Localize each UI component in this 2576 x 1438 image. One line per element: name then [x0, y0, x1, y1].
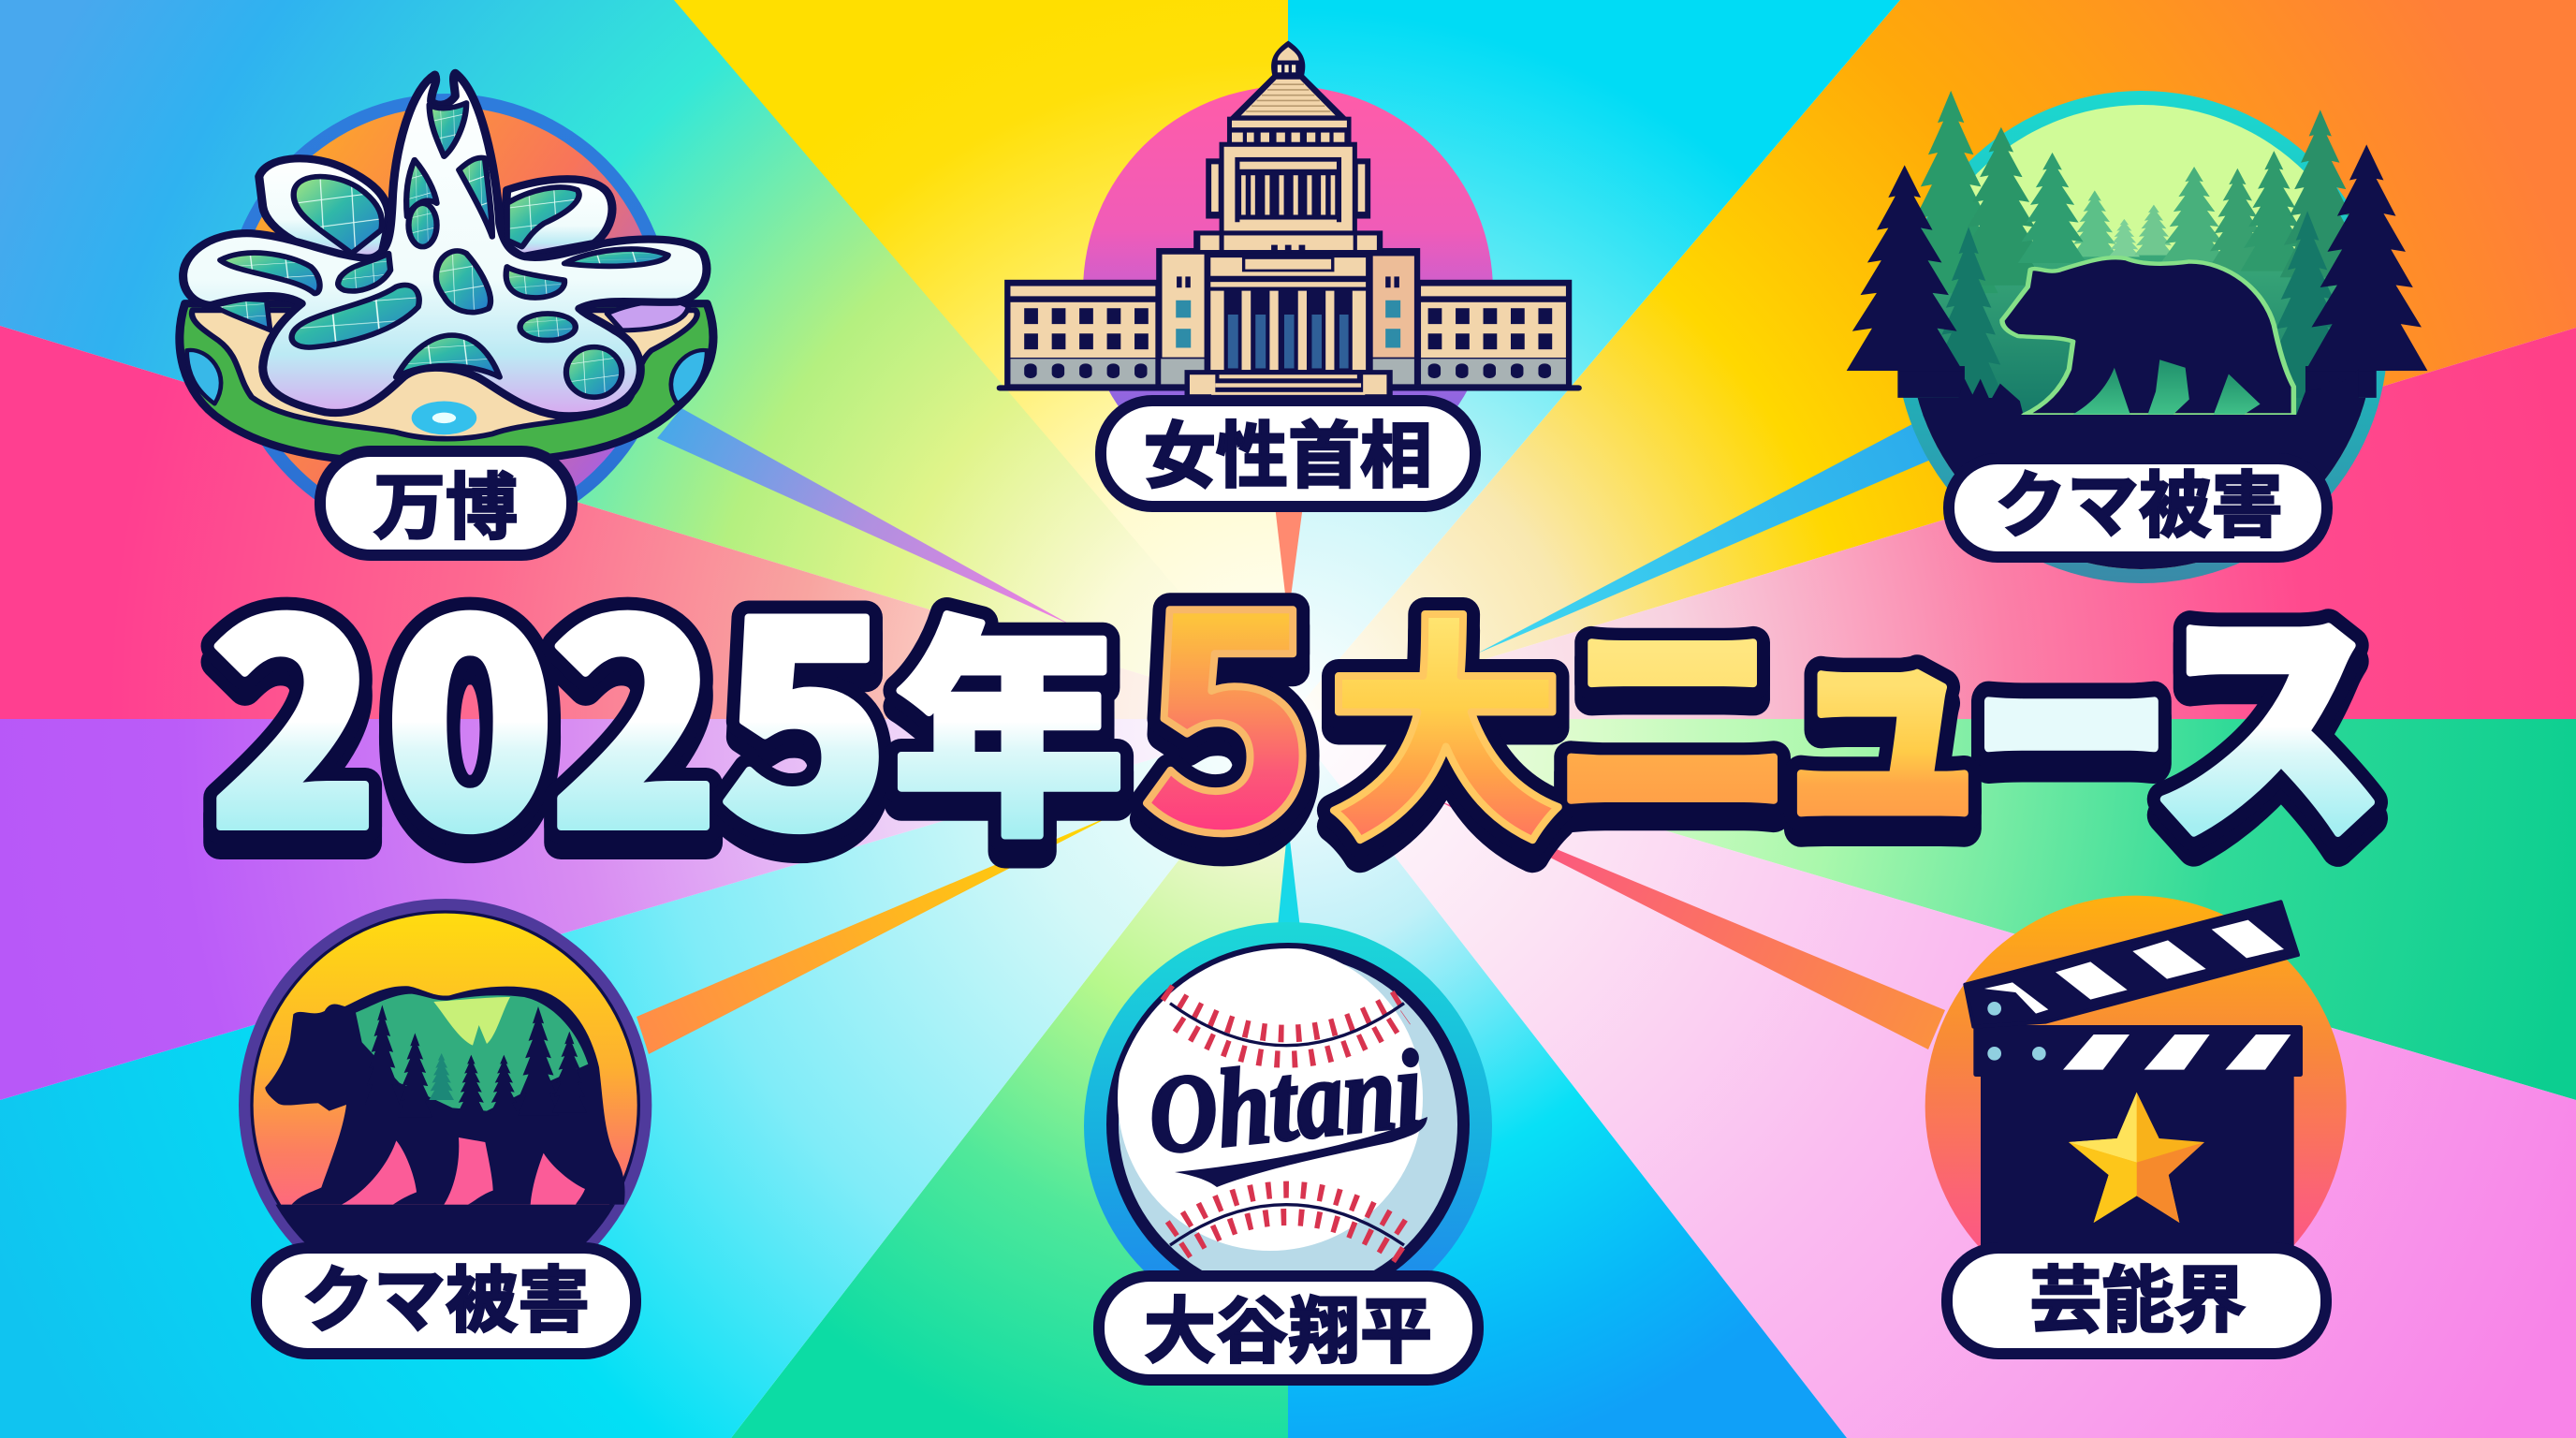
title: 2025年5大ニュース: ニ: [1551, 534, 1798, 874]
connector rays: [637, 408, 1945, 1054]
icon: bear silhouette badge: [239, 899, 651, 1354]
title: 2025年5大ニュース: ス: [2149, 524, 2387, 893]
title: 2025年5大ニュース: 大: [1325, 542, 1565, 888]
title: 2025年5大ニュース: 年: [893, 545, 1125, 881]
icon: baseball: [1084, 922, 1492, 1380]
label: クマ被害 (bottom): [256, 1248, 636, 1354]
title: 2025年5大ニュース: 2: [549, 502, 720, 908]
label: 万博: 万博: [373, 468, 518, 549]
label: 大谷翔平: [1099, 1276, 1478, 1380]
label: 女性首相: [1101, 401, 1475, 506]
label: 女性首相: 女性首相: [1144, 417, 1432, 497]
title: 2025年5大ニュース: 5: [1139, 488, 1319, 915]
title: 2025年5大ニュース: 年: [893, 545, 1125, 881]
label: クマ被害 (top): [1949, 459, 2327, 557]
icon: film clapperboard: [1925, 896, 2347, 1354]
title: 2025年5大ニュース: ニ: [1551, 534, 1798, 874]
label: クマ被害 (top): クマ被害: [1995, 466, 2283, 547]
title: 2025年5大ニュース: ス: [2149, 524, 2387, 893]
title: 2025年5大ニュース: 0: [385, 502, 555, 908]
title: 2025年5大ニュース: 0: [385, 502, 555, 908]
title: 2025年5大ニュース: ー: [1971, 538, 2172, 888]
title: 2025年5大ニュース: 大: [1325, 542, 1565, 888]
icon: expo ring building: [180, 73, 713, 555]
title: 2025年5大ニュース: 2: [549, 502, 720, 908]
title: 2025年5大ニュース: 5: [1139, 488, 1319, 915]
icon: national diet building: [997, 41, 1582, 506]
icon: bear in forest: [1847, 91, 2434, 602]
label: 万博: [320, 451, 572, 555]
title: 2025年5大ニュース: ュ: [1770, 518, 1995, 876]
title: 2025年5大ニュース: 2: [209, 502, 379, 908]
title: 2025年5大ニュース: 2: [209, 502, 379, 908]
label: 芸能界: 芸能界: [2029, 1261, 2247, 1342]
title: 2025年5大ニュース: 5: [720, 502, 890, 908]
icon: gold star: [2069, 1093, 2204, 1223]
title: 2025年5大ニュース: [209, 488, 2387, 915]
label: 芸能界: [1947, 1248, 2326, 1354]
label: 大谷翔平: 大谷翔平: [1144, 1292, 1432, 1372]
text: Ohtani script: Ohtani: [1143, 1027, 1427, 1178]
title: 2025年5大ニュース: ー: [1971, 538, 2172, 888]
label: クマ被害 (bottom): クマ被害: [301, 1261, 590, 1342]
title: 2025年5大ニュース: 5: [720, 502, 890, 908]
title: 2025年5大ニュース: ュ: [1770, 518, 1995, 876]
